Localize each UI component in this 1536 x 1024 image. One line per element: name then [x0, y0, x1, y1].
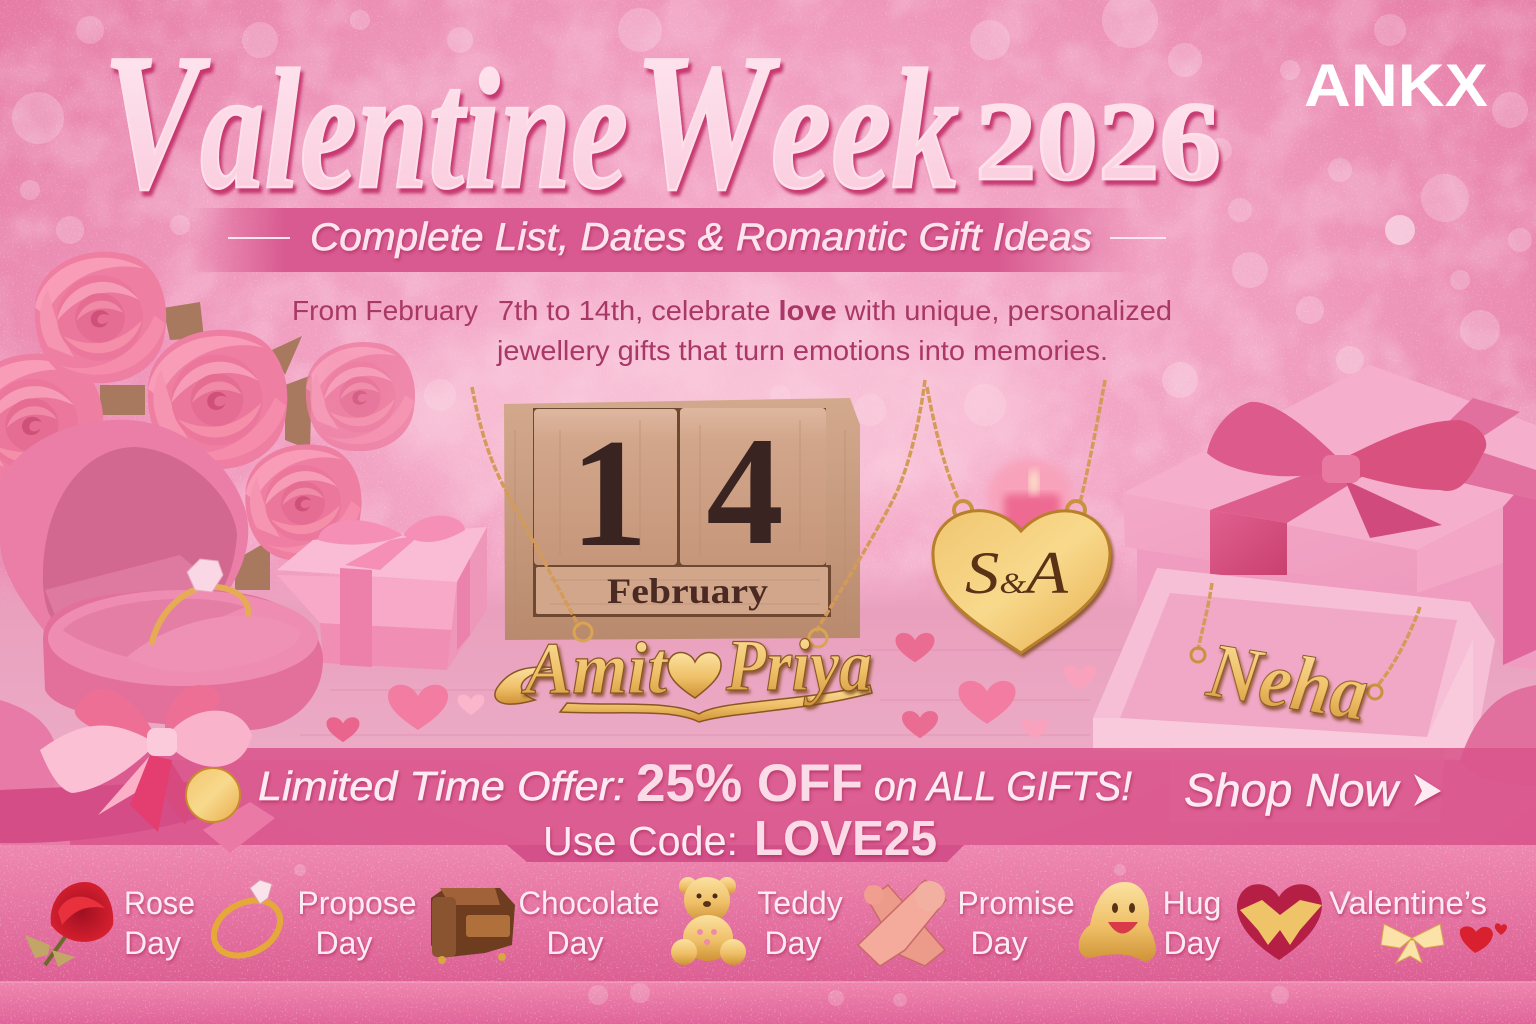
day item: Promise Day: Promise	[957, 885, 1075, 921]
subtitle banner	[190, 208, 1166, 272]
open jewellery box with Neha necklace	[1093, 568, 1495, 760]
title: Valentine Week 2026: 2026	[975, 80, 1221, 204]
date digits: 1	[570, 407, 648, 579]
necklace: S&A heart pendant	[927, 380, 1110, 653]
illustration: small pink gift box	[277, 516, 487, 670]
day item: Rose Day	[25, 882, 195, 967]
satin ribbon right	[1460, 685, 1536, 785]
offer text: Limited Time Offer:	[258, 763, 625, 809]
day item: Teddy Day: Teddy	[757, 885, 843, 921]
intro paragraph: 7th to 14th, celebrate love with unique, personalized	[498, 295, 1172, 326]
large pink gift box with bow	[1123, 365, 1536, 670]
day item: Hug Day: Hug	[1163, 885, 1221, 921]
day item: Hug Day: Day	[1164, 925, 1220, 961]
necklace: Amit Priya nameplate: Amit	[521, 628, 669, 710]
title: Valentine Week 2026: Valentine	[103, 14, 628, 230]
calendar blocks: 14 February: 4	[706, 405, 784, 577]
promo code	[543, 812, 937, 866]
box lid	[0, 420, 248, 640]
calendar blocks: 14 February: February	[607, 571, 768, 611]
day item: Rose Day: Rose	[124, 885, 195, 921]
day item: Valentine's: Valentine’s	[1329, 885, 1487, 921]
calendar blocks: 14 February	[504, 398, 860, 640]
intro paragraph: From February	[292, 295, 478, 326]
day item: Promise Day: Day	[970, 925, 1028, 961]
day item: Valentine's	[1237, 884, 1507, 963]
day item: Chocolate Day	[431, 885, 660, 964]
logo: ANKX: ANKX	[1304, 52, 1488, 119]
promo code: Use Code:	[543, 818, 738, 864]
scattered hearts	[326, 633, 1096, 742]
illustration: velvet ring box with ring	[0, 420, 323, 730]
shop now button: Shop Now	[1184, 764, 1401, 816]
day item: Promise Day	[858, 880, 1075, 966]
candle glow	[988, 459, 1072, 534]
bottom strip background	[0, 845, 1536, 1024]
title: Valentine Week 2026	[103, 14, 1221, 230]
promo code: LOVE25	[754, 812, 937, 866]
illustration: pink roses	[0, 252, 415, 590]
day item: Chocolate Day: Chocolate	[518, 885, 660, 921]
offer banner	[70, 748, 1536, 862]
open jewellery box with Neha necklace: Neha	[1201, 626, 1374, 737]
ring	[152, 559, 248, 642]
left satin ribbon	[0, 700, 58, 800]
intro paragraph: jewellery gifts that turn emotions into memories.	[496, 335, 1108, 366]
day item: Propose Day: Propose	[297, 885, 417, 921]
necklace: Amit Priya nameplate: Priya	[725, 625, 872, 707]
box base	[43, 590, 323, 730]
offer text: on ALL GIFTS!	[874, 763, 1132, 809]
day item: Hug Day	[1079, 882, 1221, 962]
day item: Rose Day: Day	[124, 925, 181, 961]
subtitle banner: Complete List, Dates & Romantic Gift Ideas	[310, 216, 1092, 259]
day item: Teddy Day: Day	[764, 925, 822, 961]
illustration: ribbon bow with gold tag	[0, 685, 275, 853]
day item: Propose Day	[204, 880, 417, 967]
necklace: S&A heart pendant: S&A	[965, 540, 1068, 606]
offer text: 25% OFF	[636, 754, 863, 813]
title: Valentine Week 2026: Week	[634, 14, 959, 230]
necklace: Amit Priya nameplate	[472, 380, 925, 722]
day item: Teddy Day	[671, 877, 843, 965]
intro paragraph	[292, 295, 1172, 366]
offer text	[258, 754, 1132, 813]
day item: Propose Day: Day	[316, 925, 372, 961]
day item: Chocolate Day: Day	[546, 925, 604, 961]
